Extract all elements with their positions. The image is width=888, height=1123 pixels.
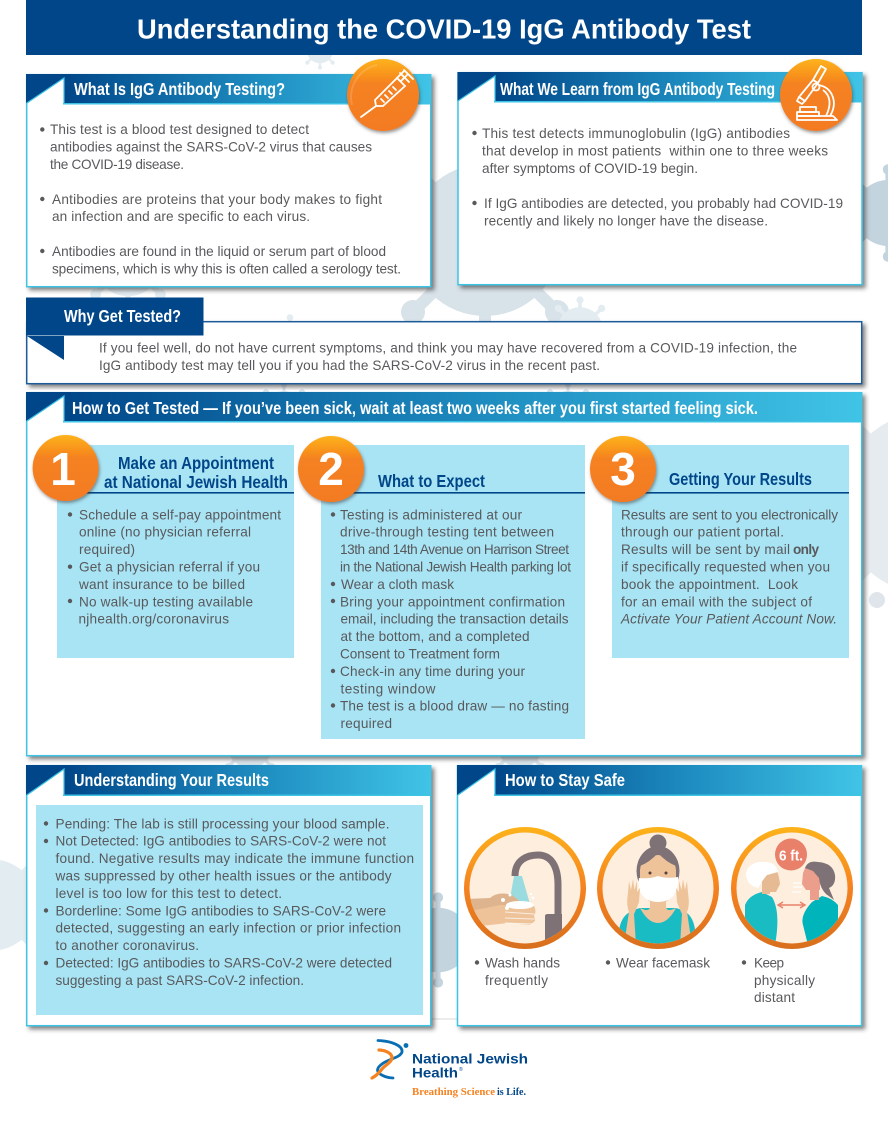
icon: keep physically distant xyxy=(731,827,853,949)
step 1 number badge: 1 xyxy=(50,443,76,495)
text: paragraph: If you feel well, do not have current symptoms, and think you may have recovered from a COVID-19 infection, the xyxy=(99,340,797,356)
text: bullets xyxy=(40,122,401,276)
step 1 list: required) xyxy=(79,542,135,557)
safety captions: physically xyxy=(754,973,815,988)
text: bullets: specimens, which is why this is often called a serology test. xyxy=(52,262,401,276)
step 1 heading: Make an Appointment xyxy=(118,453,274,473)
step 2 list: The test is a blood draw — no fasting xyxy=(340,699,569,714)
safety captions: Wear facemask xyxy=(616,956,710,970)
text: bullets: Antibodies are proteins that your body makes to fight xyxy=(52,192,382,207)
step 2 list: drive-through testing tent between xyxy=(340,525,554,540)
header band: How to Get Tested — If you’ve been sick, wait at least two weeks after you first started feeling sick. xyxy=(72,398,758,418)
text: bullets: antibodies against the SARS-CoV-2 virus that causes xyxy=(50,140,372,154)
text: bullets: the COVID-19 disease. xyxy=(50,157,184,172)
text: bullets: after symptoms of COVID-19 begin. xyxy=(482,161,698,176)
step 3 paragraph: Activate Your Patient Account Now. xyxy=(620,612,837,627)
results box: suggesting a past SARS-CoV-2 infection. xyxy=(56,973,304,988)
step 2 list: Wear a cloth mask xyxy=(341,577,454,592)
step 1 list: No walk-up testing available xyxy=(79,594,253,609)
text: bullets: This test is a blood test designed to detect xyxy=(50,122,309,137)
text: paragraph: IgG antibody test may tell you if you had the SARS-CoV-2 virus in the recent past. xyxy=(99,358,600,373)
step 2 list: required xyxy=(340,716,392,731)
panel: Why Get Tested? xyxy=(26,298,862,384)
step 3 paragraph: through our patient portal. xyxy=(621,525,784,540)
step 1 number badge xyxy=(33,435,99,501)
results box: Detected: IgG antibodies to SARS-CoV-2 were detected xyxy=(56,956,392,971)
step 1 list: Get a physician referral if you xyxy=(79,560,260,574)
safety captions: distant xyxy=(754,990,795,1005)
safety captions: Keep xyxy=(754,956,784,970)
step 2 heading: What to Expect xyxy=(378,471,485,491)
tab heading xyxy=(26,298,204,360)
step 2 list: Check-in any time during your xyxy=(340,664,525,679)
results box xyxy=(36,805,423,1015)
step 2 list xyxy=(331,507,571,731)
header band xyxy=(458,72,862,102)
text: bullets xyxy=(472,126,843,228)
text: paragraph xyxy=(99,340,797,373)
text: bullets: If IgG antibodies are detected, you probably had COVID-19 xyxy=(484,196,843,211)
results box: detected, suggesting an early infection or prior infection xyxy=(56,921,401,936)
step 1 list: want insurance to be billed xyxy=(78,577,245,592)
results box: found. Negative results may indicate the immune function xyxy=(56,851,414,866)
text: bullets: This test detects immunoglobulin (IgG) antibodies xyxy=(482,126,790,141)
header band xyxy=(26,765,431,796)
safety captions: frequently xyxy=(485,973,548,988)
logo: National Jewish Health: ® xyxy=(459,1066,463,1073)
icon: wear facemask xyxy=(597,827,719,949)
results box: level is too low for this test to detect. xyxy=(56,886,282,901)
safety captions: Wash hands xyxy=(485,956,560,970)
step 2 number badge xyxy=(298,436,364,502)
step 2 number badge: 2 xyxy=(318,443,344,495)
step 2 list: in the National Jewish Health parking lot xyxy=(340,560,571,574)
panel: How to Stay Safe xyxy=(457,765,862,1026)
logo: National Jewish Health: is Life. xyxy=(497,1086,526,1098)
title banner xyxy=(26,0,862,55)
step 2 list: 13th and 14th Avenue on Harrison Street xyxy=(340,542,569,557)
step 3 paragraph xyxy=(620,507,838,627)
safety captions xyxy=(475,956,815,1005)
panel: What Is IgG Antibody Testing? xyxy=(26,59,431,287)
title banner: Understanding the COVID-19 IgG Antibody Test xyxy=(137,14,751,44)
logo: National Jewish Health: Breathing Science xyxy=(412,1086,495,1098)
header band: What Is IgG Antibody Testing? xyxy=(74,79,285,99)
logo: National Jewish Health: Health xyxy=(412,1066,458,1080)
results box: was suppressed by other health issues or the antibody xyxy=(54,869,392,884)
step 2 list: at the bottom, and a completed xyxy=(340,629,530,644)
text: bullets: that develop in most patients within one to three weeks xyxy=(482,144,828,158)
step 2 list: Bring your appointment confirmation xyxy=(340,594,565,609)
step 2 list: testing window xyxy=(340,681,436,696)
results box: Not Detected: IgG antibodies to SARS-CoV-2 were not xyxy=(56,834,386,849)
logo: National Jewish Health: National Jewish xyxy=(412,1052,528,1066)
text: bullets: recently and likely no longer have the disease. xyxy=(484,214,768,228)
step 3 box xyxy=(590,436,849,658)
step 3 heading: Getting Your Results xyxy=(669,469,812,489)
panel: What We Learn from IgG Antibody Testing xyxy=(458,59,862,285)
step 1 box xyxy=(33,435,294,658)
icon: syringe xyxy=(347,59,419,131)
header band xyxy=(457,765,862,796)
step 3 paragraph: Results will be sent by mail xyxy=(621,542,790,557)
icon: microscope xyxy=(780,59,852,131)
step 3 paragraph: book the appointment. Look xyxy=(621,577,798,592)
text: bullets: an infection and are specific to each virus. xyxy=(52,209,310,224)
step 2 list: email, including the transaction details xyxy=(340,612,569,627)
tab heading: Why Get Tested? xyxy=(64,306,181,326)
header band: How to Stay Safe xyxy=(505,770,625,790)
step 1 heading xyxy=(104,453,288,492)
panel: Understanding Your Results xyxy=(26,765,431,1026)
icon: wash hands xyxy=(464,827,586,949)
logo mark: helix xyxy=(372,1040,408,1078)
header band: Understanding Your Results xyxy=(74,770,269,790)
text: bullets: Antibodies are found in the liquid or serum part of blood xyxy=(52,244,386,259)
panel: How to Get Tested xyxy=(26,392,862,756)
step 1 list xyxy=(68,507,281,627)
results box: Pending: The lab is still processing your blood sample. xyxy=(56,816,390,831)
header band: What We Learn from IgG Antibody Testing xyxy=(500,79,775,99)
step 2 list: Testing is administered at our xyxy=(340,507,522,522)
step 3 paragraph: for an email with the subject of xyxy=(621,594,812,609)
results box: to another coronavirus. xyxy=(56,938,199,953)
step 2 box xyxy=(298,436,585,739)
icon: keep physically distant: 6 ft. xyxy=(779,848,803,864)
step 1 list: njhealth.org/coronavirus xyxy=(78,612,229,627)
header band xyxy=(26,74,431,104)
results box: Borderline: Some IgG antibodies to SARS-CoV-2 were xyxy=(56,903,386,918)
step 2 list: Consent to Treatment form xyxy=(340,646,500,662)
logo: National Jewish Health xyxy=(372,1040,528,1098)
step 3 number badge: 3 xyxy=(610,443,636,495)
step 3 paragraph: Results are sent to you electronically xyxy=(621,507,838,522)
step 3 number badge xyxy=(590,436,656,502)
step 1 list: online (no physician referral xyxy=(79,525,251,540)
step 1 heading: at National Jewish Health xyxy=(104,472,288,492)
step 1 list: Schedule a self-pay appointment xyxy=(79,507,281,522)
step 3 paragraph: if specifically requested when you xyxy=(621,560,830,574)
header band xyxy=(26,392,862,422)
step 3 paragraph: only xyxy=(793,542,819,557)
